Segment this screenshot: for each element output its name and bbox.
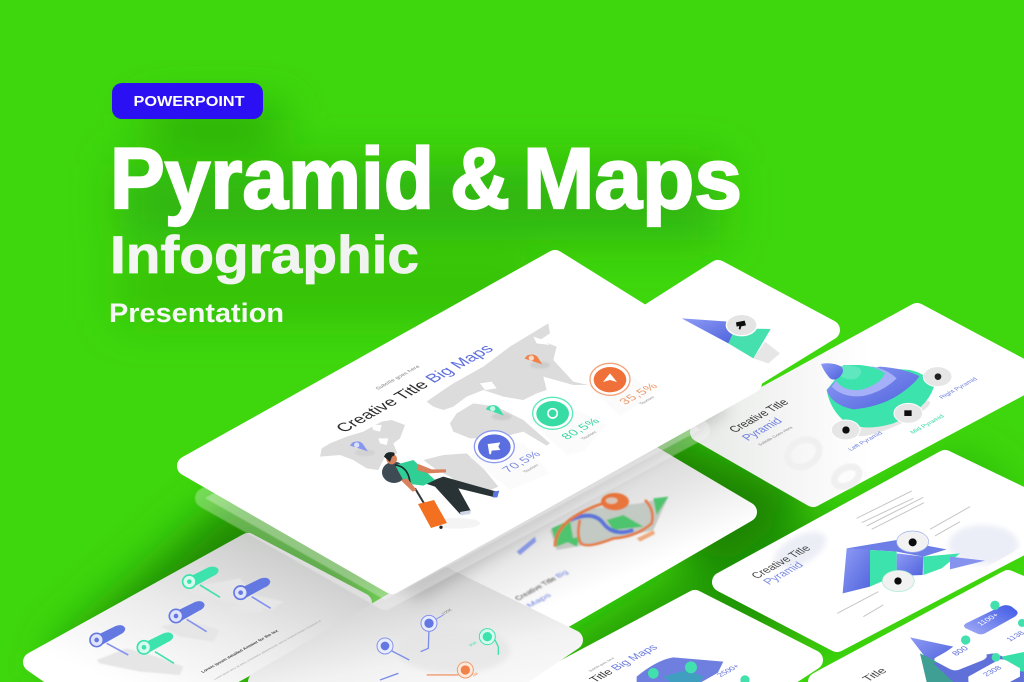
title: Pyramid <box>110 131 434 227</box>
heading: creative title pyramid <box>748 543 814 587</box>
icon: flag badge <box>726 314 757 336</box>
pyramid labels: Left Pyramid <box>847 431 885 452</box>
cone pyramid graphic <box>821 363 934 442</box>
badge: powerpoint <box>112 83 263 119</box>
callout blue top: 100K <box>440 608 453 616</box>
pin green 2 <box>137 632 174 663</box>
stat: 70,5%: Tourism <box>522 463 540 474</box>
subtitle: Subtitle goes here <box>375 365 422 391</box>
pale backdrop blobs <box>774 524 1018 568</box>
blurred side label <box>517 537 536 555</box>
pin blue 2 <box>169 601 207 632</box>
heading: creative title pyramid: Pyramid <box>739 416 785 443</box>
pin: blue <box>350 441 375 456</box>
globe map graphic <box>637 657 723 682</box>
stat: 80,5%: 80,5% <box>558 416 603 442</box>
pin: green <box>486 405 512 420</box>
blurred heading: Creative Title Big <box>513 569 570 602</box>
heading: creative title big maps: Subtitle goes here <box>588 657 616 673</box>
bullet text lines <box>837 491 970 617</box>
depth shadows under lower cards <box>60 420 1024 682</box>
card: bottom centre big maps slide <box>470 600 813 682</box>
stat box 800: 800 <box>949 645 971 657</box>
location pins <box>350 354 550 456</box>
subtitle: presentation: Presentation <box>109 298 284 328</box>
pin blue 1 <box>234 578 271 608</box>
stat: 35,5%: Tourism <box>638 395 656 406</box>
pin: orange <box>525 354 550 369</box>
heading: creative title pyramid: Subtitle Goes Here <box>757 425 794 447</box>
subtitle: infographic: Infographic <box>110 226 419 285</box>
heading: creative title pyramid: Creative Title <box>748 543 814 581</box>
icon: blue flag <box>474 431 514 463</box>
stair pyramid graphic <box>843 540 985 593</box>
speckled map <box>397 627 510 673</box>
watermark shapes <box>783 434 862 491</box>
world map <box>320 323 588 492</box>
badge: powerpoint: POWERPOINT <box>134 94 245 110</box>
legs <box>425 477 497 514</box>
stat: 70,5%: 70,5% <box>499 449 544 475</box>
stat box 2500: 2500+ <box>715 663 742 678</box>
pyramid labels: Mid Pyramid <box>909 414 947 435</box>
stat: 35,5%: 35,5% <box>616 381 661 407</box>
heading: creative title big maps: Creative Title Big Maps <box>332 342 498 435</box>
suitcase <box>415 488 425 505</box>
title: Maps <box>523 131 742 227</box>
card: stair pyramid slide <box>722 460 1024 642</box>
card: cone pyramid slide <box>700 313 1024 497</box>
pin green 1 <box>183 567 220 597</box>
card: top right pyramid slide <box>600 270 830 410</box>
icon badges <box>831 367 952 440</box>
pin blue 3 <box>90 625 128 655</box>
triangle pyramid graphic <box>682 314 780 363</box>
heading: creative title pyramid: Pyramid <box>760 560 806 587</box>
traveller figure <box>382 452 499 529</box>
stat box 1100: 1100+ <box>975 612 1002 627</box>
panel: main slide <box>187 260 752 584</box>
heading: creative title pyramid: Creative Title <box>726 397 792 435</box>
title glow shadow <box>120 112 720 320</box>
icon badges <box>882 531 929 592</box>
title <box>110 131 742 227</box>
callout orange: 1M <box>470 671 480 677</box>
card: bottom right stats slide <box>818 580 1024 682</box>
caption text: Lorem ipsum detailed Answer for the tex <box>200 629 280 674</box>
torso <box>395 460 435 486</box>
card: blurred map slide: Maps <box>524 592 553 609</box>
icon: green globe <box>533 397 573 429</box>
heading: creative title pyramid <box>726 397 794 447</box>
pyramid graphic <box>910 637 1024 682</box>
title: & <box>450 131 510 227</box>
grey map blobs <box>97 578 283 675</box>
stat box 2308: 2308 <box>981 664 1004 678</box>
head <box>386 454 397 464</box>
caption text: Lorem ipsum dolor sit amet, consectetur adipiscing elit, sed do eiusmod tempor incididunt ut <box>213 619 322 681</box>
pyramid labels <box>847 376 980 452</box>
card: bottom centre callouts slide <box>258 575 573 682</box>
translucent layer under main slide <box>205 300 700 600</box>
main slide shadow <box>230 310 730 600</box>
card: bottom left map pins slide <box>33 543 362 682</box>
icon: orange arrow <box>590 363 630 395</box>
pyramid labels: Right Pyramid <box>938 376 980 400</box>
callout blue left <box>377 638 409 680</box>
callout green: 90K <box>467 641 478 647</box>
arms <box>417 464 446 473</box>
card: blurred map slide <box>400 425 747 632</box>
stat card backgrounds <box>470 373 653 490</box>
stat: 80,5%: Tourism <box>580 430 598 441</box>
blurred tangled map <box>517 493 668 555</box>
backpack <box>382 462 406 483</box>
